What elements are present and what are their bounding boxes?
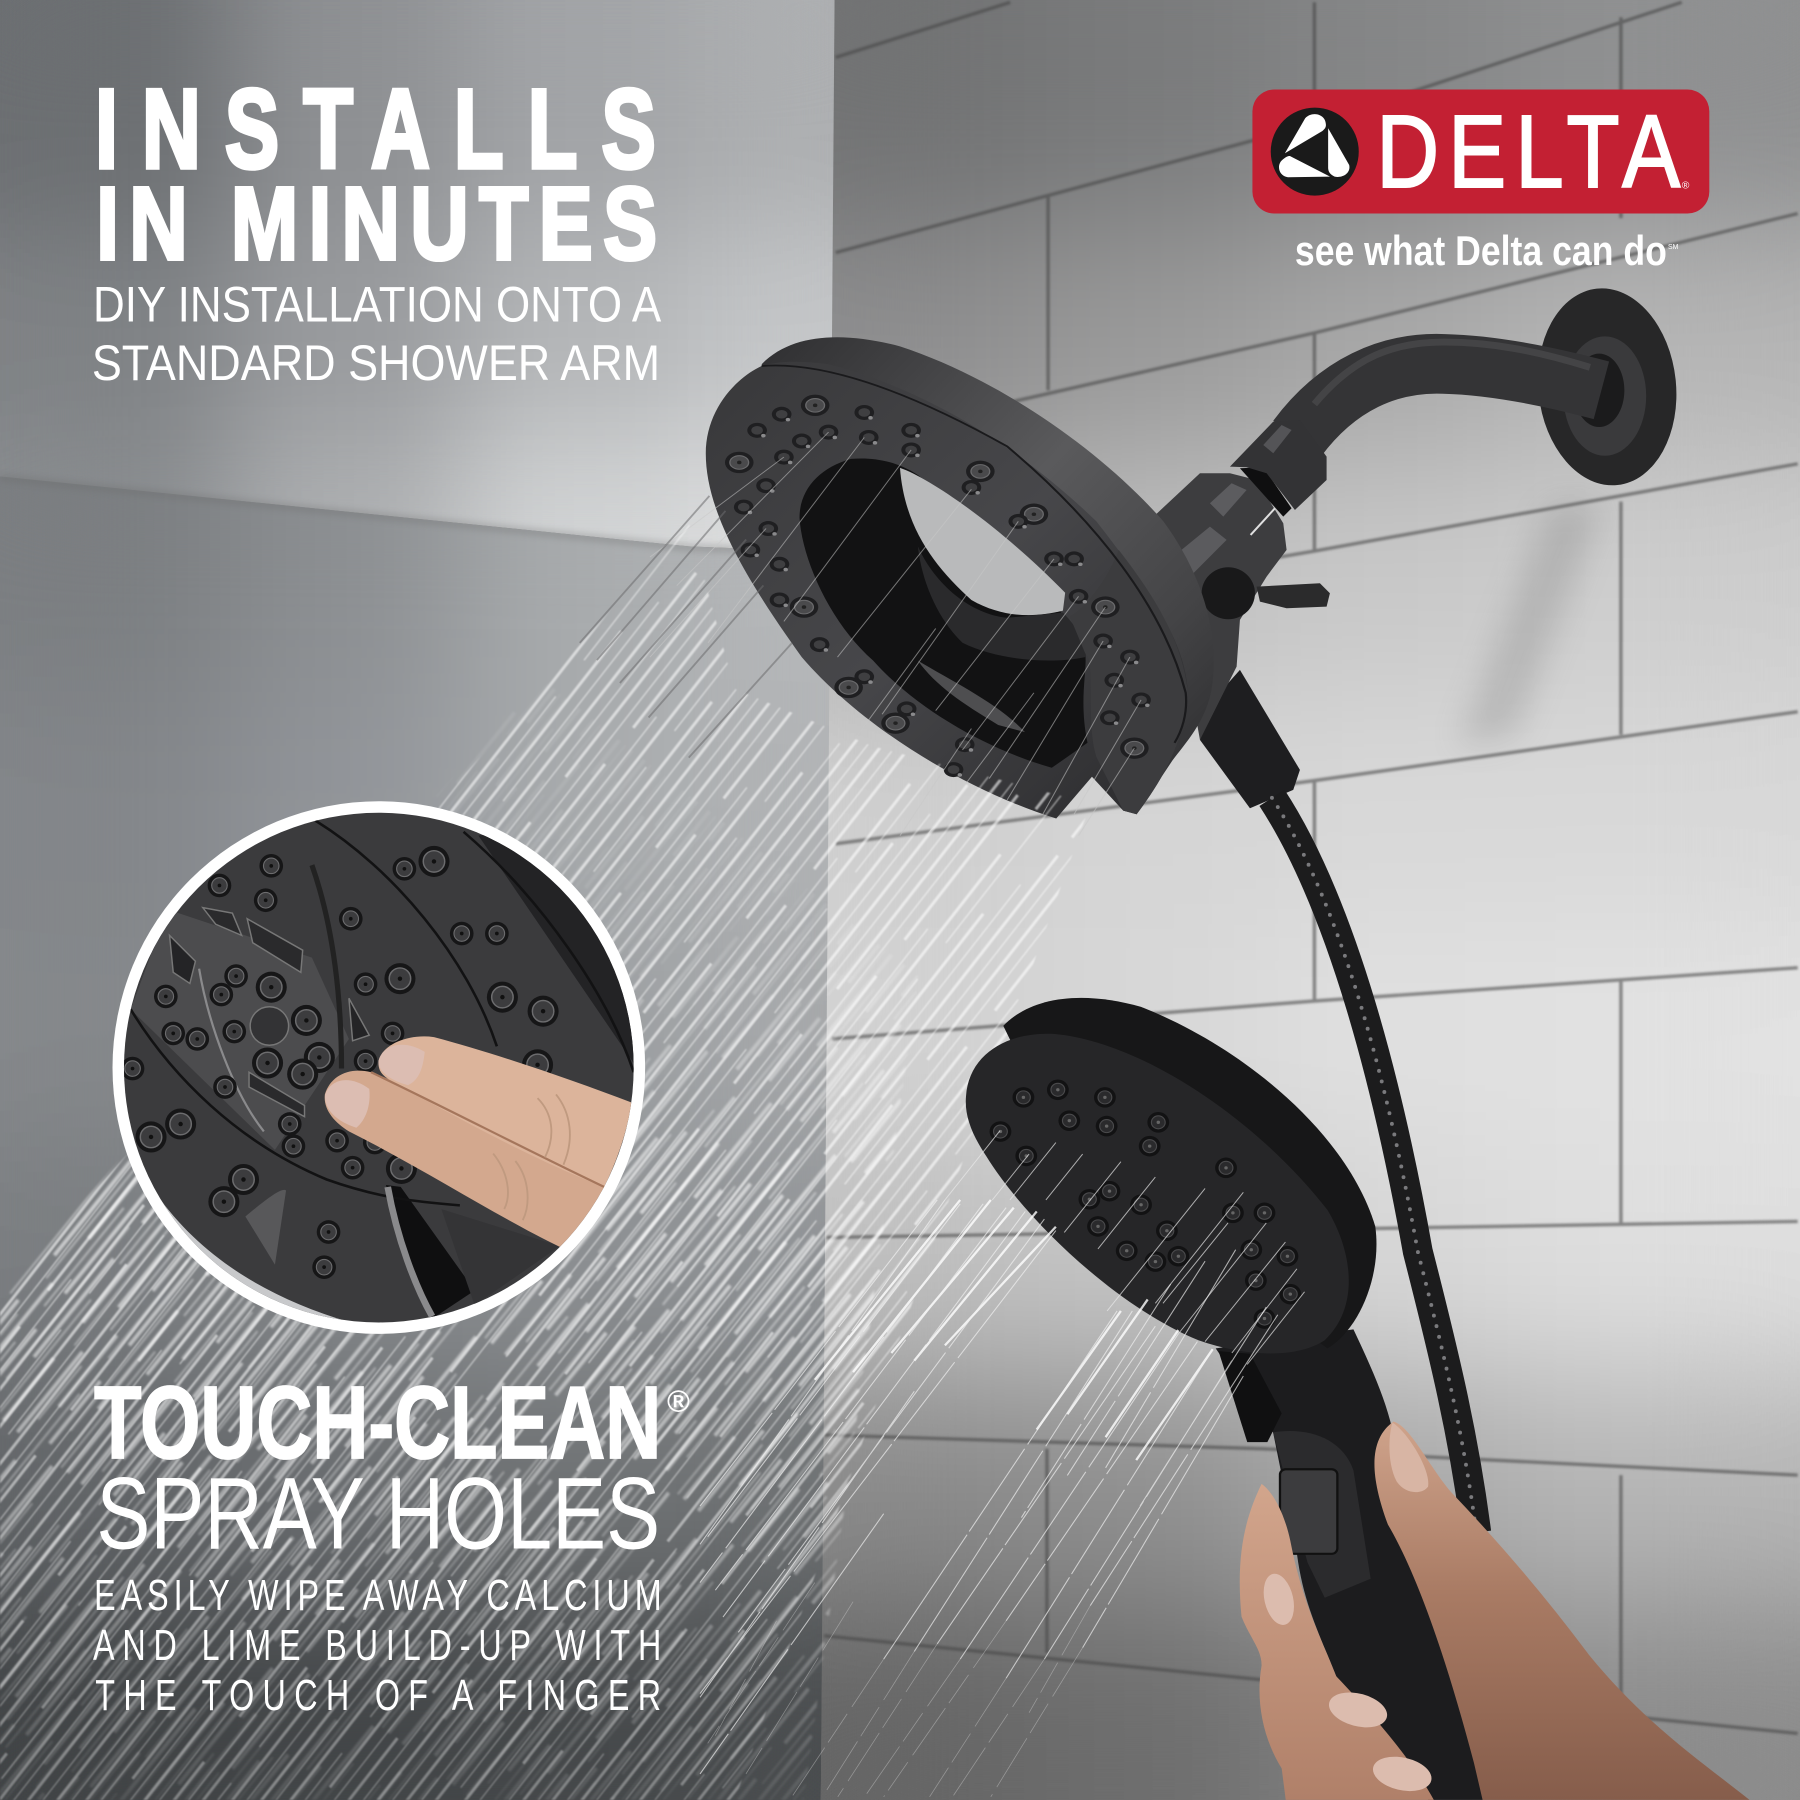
main water spray: long streams <box>0 522 1091 1800</box>
hand shower water jets <box>700 1131 1305 1797</box>
text block: DIY installation: STANDARD SHOWER ARM <box>92 334 660 391</box>
mode button <box>1273 1431 1371 1598</box>
inset white ring <box>112 801 645 1334</box>
lever <box>1257 583 1330 608</box>
tagline: see what Delta can do <box>1295 228 1667 274</box>
icon: curved shower arm <box>1297 364 1601 439</box>
see-through hole <box>900 468 1065 615</box>
fingers <box>1240 1484 1434 1800</box>
central dock opening <box>800 458 1087 768</box>
fingernails <box>378 1045 425 1085</box>
wordmark: DELTA <box>1376 95 1680 210</box>
main water spray: dense lower streaks <box>0 925 908 1800</box>
front crescent <box>1070 550 1188 814</box>
heading: installs in minutes: IN MINUTES <box>96 165 657 281</box>
text block: DIY installation: DIY INSTALLATION ONTO A <box>93 275 661 332</box>
left wall seam <box>0 478 833 552</box>
overhead shower head <box>650 337 1214 836</box>
text block: DIY installation <box>92 275 661 391</box>
flexible hose <box>1272 798 1476 1533</box>
panel curves <box>131 821 634 1205</box>
background: lower left wall gradient <box>0 459 835 1800</box>
finger crease shadow <box>371 1072 604 1187</box>
knuckle wrinkles <box>493 1094 570 1220</box>
fingernails <box>1259 1571 1435 1796</box>
text block: easily wipe away: THE TOUCH OF A FINGER <box>95 1671 661 1720</box>
text block: easily wipe away <box>93 1571 662 1720</box>
bright jets near the head <box>815 1200 1213 1460</box>
swivel nut <box>1230 420 1327 510</box>
spray face ring <box>706 362 1188 819</box>
highlight tick <box>1251 508 1275 535</box>
center dimple <box>250 1007 289 1045</box>
arm shadow on wall <box>1458 505 1601 746</box>
heading: touch-clean spray holes: SPRAY HOLES <box>96 1457 660 1571</box>
heading: installs in minutes: INSTALLS <box>95 65 656 192</box>
icon: wall flange <box>1528 281 1686 492</box>
background: tiled right wall <box>821 0 1800 1800</box>
thumb and palm <box>1374 1422 1749 1800</box>
Delta logo badge: ® <box>1682 180 1690 191</box>
shower arm and wall flange <box>1297 281 1686 492</box>
thin grey jets near head <box>580 496 792 758</box>
heading: touch-clean spray holes: ® <box>667 1384 690 1419</box>
inset circle: touch-clean close-up <box>112 801 646 1334</box>
knob <box>1202 567 1255 619</box>
surface shading <box>131 909 349 1150</box>
hub body <box>1150 473 1287 740</box>
water jets leaving the face <box>650 432 1141 836</box>
clamp <box>1219 1351 1282 1442</box>
spray nozzles <box>725 395 1151 777</box>
upper finger <box>378 1036 632 1187</box>
dark ring <box>1240 467 1292 517</box>
rim <box>1003 998 1376 1348</box>
elongated slots <box>203 908 305 1117</box>
nozzles <box>990 1079 1301 1329</box>
background: upper left wall gradient <box>0 0 835 552</box>
text block: easily wipe away: AND LIME BUILD-UP WITH <box>93 1621 661 1670</box>
thumbnail <box>1389 1423 1428 1492</box>
icon: Delta triangle mark <box>1271 108 1359 196</box>
lower hose mount <box>1200 670 1300 808</box>
heading: touch-clean spray holes: TOUCH-CLEAN <box>94 1364 661 1480</box>
spray face <box>966 1034 1349 1353</box>
heading: installs in minutes <box>95 65 657 281</box>
spray nozzles <box>121 846 559 1279</box>
text block: easily wipe away: EASILY WIPE AWAY CALCIUM <box>94 1571 662 1620</box>
hand shower held in hand <box>966 998 1749 1800</box>
tagline: SM <box>1668 244 1679 251</box>
swivel hub, knob and hose mount <box>1150 420 1330 808</box>
red badge <box>1252 90 1709 214</box>
fading lower jets <box>708 1583 1090 1797</box>
Delta logo badge <box>1252 90 1709 214</box>
rim inner line <box>762 365 1186 743</box>
heading: touch-clean spray holes <box>94 1364 690 1571</box>
handle <box>1216 1329 1483 1800</box>
jets across the spray face <box>945 1131 1305 1364</box>
long fine jets <box>700 1200 1278 1774</box>
pale wall patch <box>163 1203 341 1320</box>
rim <box>762 337 1214 814</box>
lower finger <box>325 1071 606 1247</box>
tile grout lines <box>824 2 1798 1733</box>
